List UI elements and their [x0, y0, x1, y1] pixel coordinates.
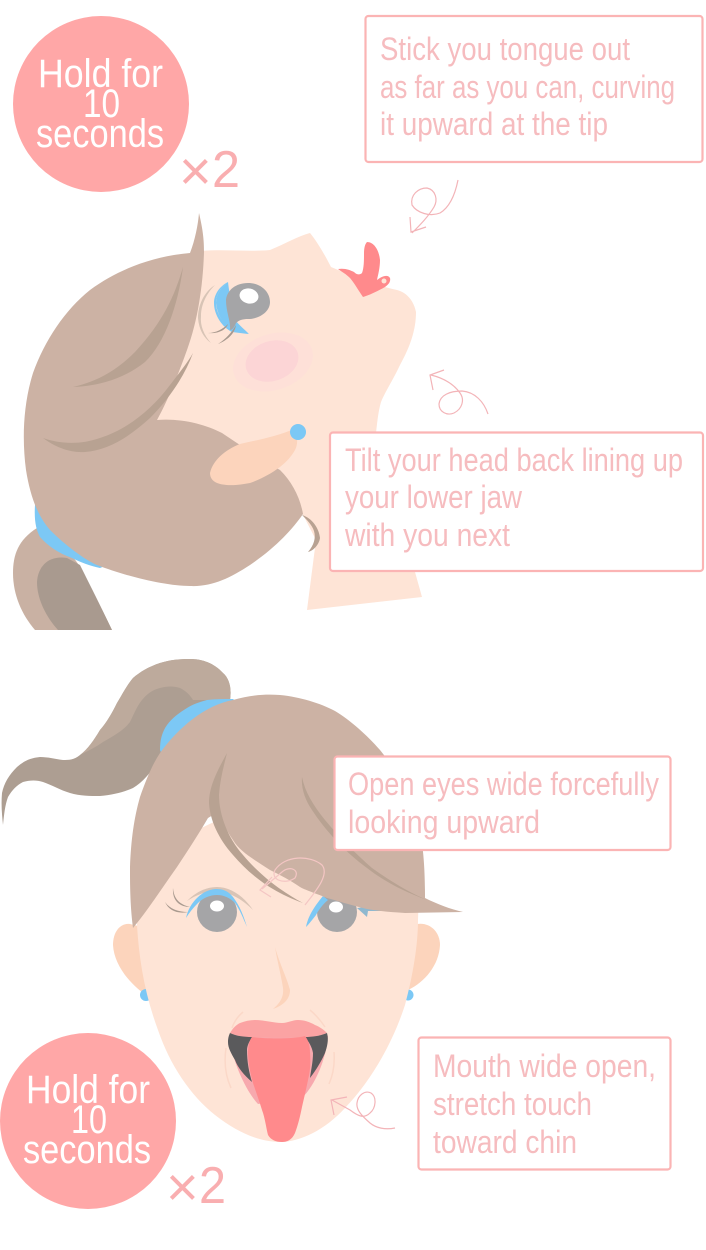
hair band [35, 500, 120, 568]
extended tongue [338, 242, 390, 297]
hair [130, 695, 463, 928]
callout: hold 10 seconds lower: 10 [71, 1098, 107, 1142]
callout: hold 10 seconds [13, 16, 189, 192]
callout: stick tongue out [366, 16, 702, 162]
callout: mouth wide open: stretch touch [433, 1086, 592, 1122]
repeat count [179, 139, 240, 202]
callout: tilt head back: with you next [344, 517, 510, 553]
callout: mouth wide open: toward chin [433, 1124, 577, 1160]
callout: open eyes: looking upward [348, 804, 540, 840]
hair strand lower [43, 353, 193, 452]
callout: hold 10 seconds: seconds [36, 112, 164, 156]
repeat count: × [179, 139, 212, 202]
illustration: head tilted back [13, 213, 422, 630]
hair strand top [73, 267, 183, 387]
hair curl at nape [302, 515, 320, 552]
repeat count lower: × [166, 1155, 199, 1218]
ponytail [2, 659, 231, 825]
callout: tilt head back [330, 432, 703, 571]
left ear [113, 924, 155, 998]
right ear [405, 924, 440, 990]
hair [24, 213, 303, 586]
callout: hold 10 seconds: 10 [83, 82, 120, 126]
eye [198, 282, 270, 344]
face and neck [150, 233, 422, 610]
earring [290, 424, 306, 440]
callout: open eyes: Open eyes wide forcefully [348, 766, 659, 802]
repeat count lower: 2 [199, 1157, 226, 1215]
arrow: toward chin [331, 1092, 395, 1129]
left earring [140, 989, 152, 1001]
repeat count lower [166, 1155, 226, 1218]
callout: hold 10 seconds lower [0, 1033, 176, 1209]
ponytail [13, 528, 112, 630]
hair band [160, 699, 240, 755]
bang shadow [209, 753, 303, 903]
callout: mouth wide open: Mouth wide open, [433, 1048, 656, 1084]
nose [273, 947, 290, 1009]
bang strand [302, 777, 427, 900]
callout: hold 10 seconds: Hold for [38, 52, 163, 96]
ear [210, 429, 297, 485]
callout: tilt head back: your lower jaw [345, 479, 523, 515]
left eye [165, 887, 253, 932]
callout: stick tongue out: Stick you tongue out [380, 31, 630, 67]
blush [225, 323, 321, 401]
repeat count: 2 [212, 141, 240, 199]
illustration: front face [2, 659, 463, 1142]
arrow: head tilt [430, 370, 488, 414]
facial creases [225, 1010, 334, 1088]
callout: hold 10 seconds lower: Hold for [26, 1068, 150, 1112]
mouth [228, 1020, 328, 1142]
callout: stick tongue out: it upward at the tip [380, 106, 608, 142]
face [135, 790, 420, 1142]
right earring [402, 990, 414, 1000]
callout: open eyes [334, 756, 670, 850]
arrow: eyes upward [260, 858, 324, 905]
callout: mouth wide open [418, 1038, 670, 1170]
right eye [306, 892, 383, 932]
arrow: to tongue [410, 180, 458, 233]
callout: hold 10 seconds lower: seconds [23, 1128, 151, 1172]
